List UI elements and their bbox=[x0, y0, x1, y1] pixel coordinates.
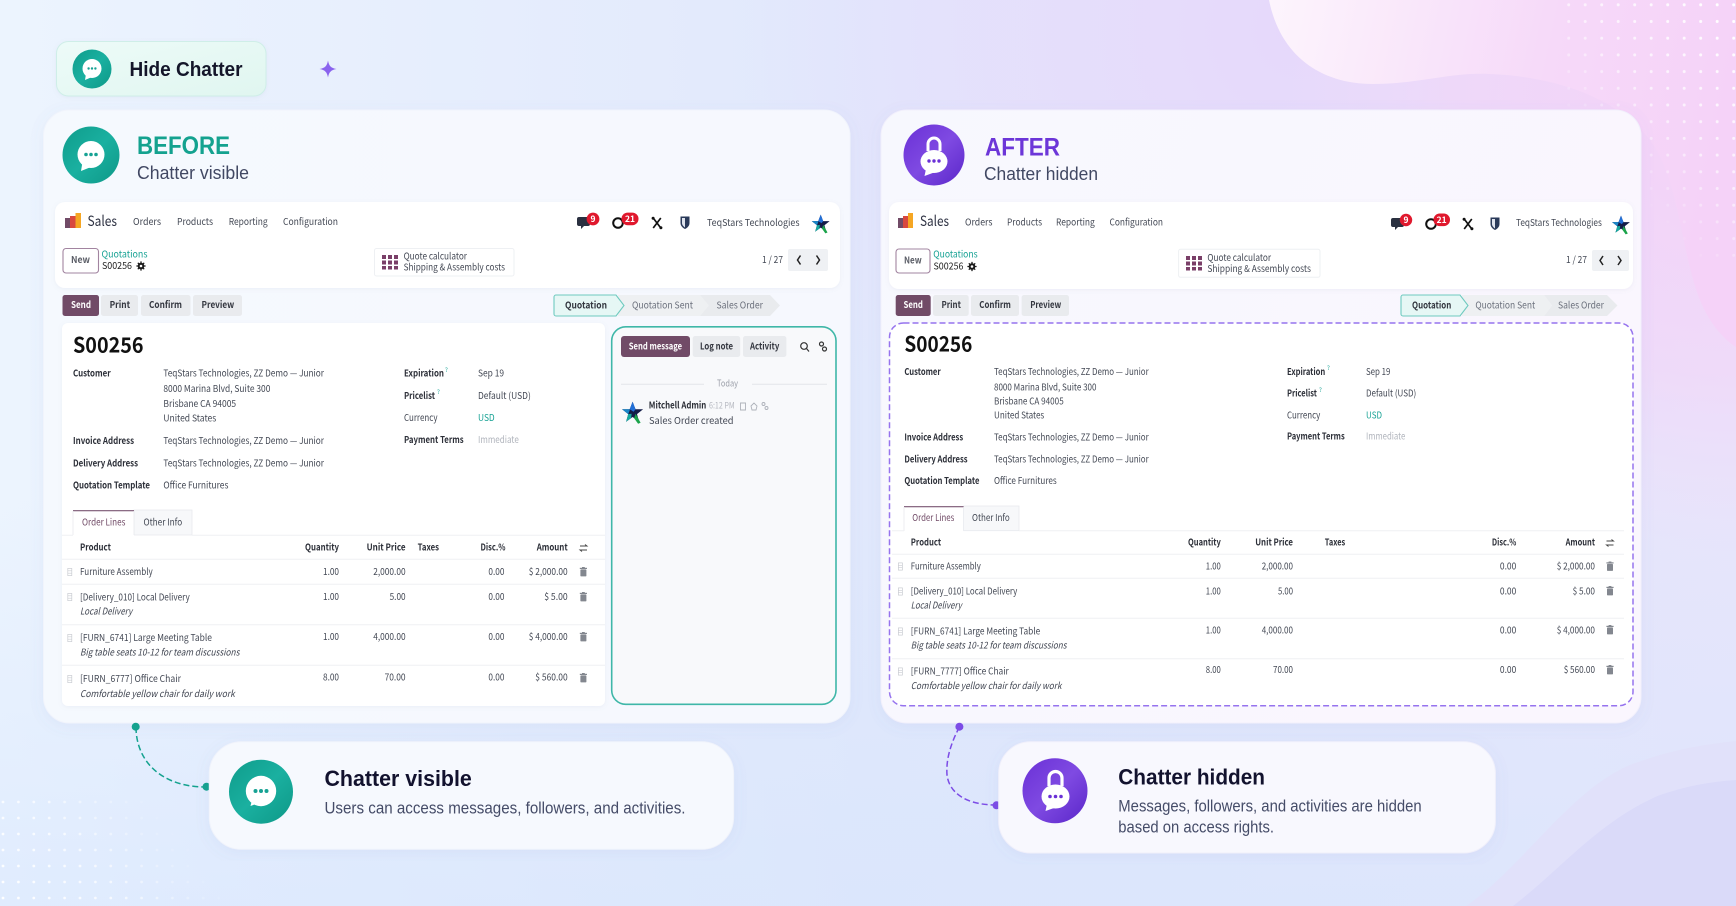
order lines table: 0.00 bbox=[488, 589, 504, 603]
order lines table bbox=[68, 539, 587, 700]
pager bbox=[1566, 250, 1629, 271]
action buttons: Print bbox=[942, 297, 961, 311]
icons: systray: 21 bbox=[1437, 214, 1447, 226]
order lines table: $ 5.00 bbox=[1573, 583, 1595, 597]
customer fields: Office Furnitures bbox=[994, 473, 1057, 487]
order lines table: Disc.% bbox=[480, 539, 506, 553]
order lines table: Amount bbox=[1565, 535, 1595, 549]
form sheet with dashed outline bbox=[890, 323, 1633, 706]
order lines table: [Delivery_010] Local Delivery bbox=[911, 583, 1017, 597]
menu: Products bbox=[1007, 214, 1042, 228]
order lines table: 0.00 bbox=[1500, 662, 1516, 676]
order lines table: [Delivery_010] Local Delivery bbox=[80, 589, 190, 603]
order lines table: 0.00 bbox=[488, 564, 504, 578]
order fields: ? bbox=[1327, 363, 1330, 372]
order lines table: 1.00 bbox=[1206, 622, 1221, 636]
connector: before bbox=[132, 723, 210, 791]
menu: Reporting bbox=[1056, 214, 1095, 228]
icon: chat bubble bbox=[229, 760, 293, 824]
customer fields: TeqStars Technologies, ZZ Demo — Junior bbox=[994, 451, 1149, 465]
callout: chatter visible bbox=[209, 742, 734, 849]
panel: after bbox=[881, 110, 1641, 723]
callout: chatter hidden bbox=[999, 742, 1495, 853]
company name: TeqStars Technologies bbox=[1516, 215, 1602, 229]
breadcrumb bbox=[933, 247, 978, 272]
order lines table: Quantity bbox=[1188, 535, 1221, 549]
order fields: Default (USD) bbox=[478, 388, 531, 402]
new button bbox=[63, 248, 98, 273]
quote calculator bbox=[1179, 249, 1320, 277]
order fields: Currency bbox=[404, 410, 438, 424]
order fields: USD bbox=[1366, 407, 1382, 421]
icon: avatar star bbox=[812, 215, 830, 233]
quote calculator: Quote calculator bbox=[404, 248, 467, 262]
customer fields: Delivery Address bbox=[73, 455, 138, 469]
customer fields: Invoice Address bbox=[904, 429, 963, 443]
order fields: ? bbox=[1319, 385, 1322, 394]
order lines table: Big table seats 10-12 for team discussions bbox=[911, 638, 1068, 652]
order fields: Sep 19 bbox=[478, 366, 504, 380]
order lines table: 0.00 bbox=[1500, 559, 1516, 573]
icons: systray: 9 bbox=[590, 213, 596, 225]
customer fields: Quotation Template bbox=[73, 477, 150, 491]
order lines table: 2,000.00 bbox=[1262, 559, 1293, 573]
order lines table: [FURN_6741] Large Meeting Table bbox=[80, 630, 212, 644]
tabs: Order Lines bbox=[82, 515, 126, 529]
customer fields bbox=[73, 366, 324, 491]
tabs bbox=[73, 510, 192, 536]
subheading: Chatter visible bbox=[137, 163, 249, 183]
tabs: Other Info bbox=[972, 510, 1010, 524]
order lines table: $ 560.00 bbox=[1564, 662, 1595, 676]
form sheet bbox=[62, 323, 605, 706]
date separator: Today bbox=[717, 377, 738, 390]
heading: BEFORE: BEFORE bbox=[137, 132, 230, 160]
customer fields: 8000 Marina Blvd, Suite 300 bbox=[163, 381, 270, 395]
order lines table: Disc.% bbox=[1492, 535, 1516, 549]
icon: sales logo bbox=[898, 213, 913, 228]
icons: search and followers bbox=[801, 342, 826, 352]
icon: avatar star bbox=[1612, 216, 1630, 234]
pager: 1 / 27 bbox=[762, 252, 783, 266]
pager: 1 / 27 bbox=[1566, 252, 1587, 266]
status bar: Quotation bbox=[1412, 298, 1451, 312]
callout text: Messages, followers, and activities are hidden bbox=[1118, 798, 1422, 816]
tabs bbox=[904, 506, 1019, 532]
chatter buttons: Log note bbox=[700, 339, 733, 353]
callout text: based on access rights. bbox=[1118, 819, 1274, 837]
order lines table: 8.00 bbox=[323, 670, 339, 684]
order lines table: $ 4,000.00 bbox=[1557, 622, 1595, 636]
order lines table: Amount bbox=[536, 539, 568, 553]
order lines table: Comfortable yellow chair for daily work bbox=[911, 678, 1063, 692]
chatter buttons: Send message bbox=[629, 339, 683, 353]
order lines table: Furniture Assembly bbox=[911, 559, 981, 573]
order lines table: Big table seats 10-12 for team discussions bbox=[80, 644, 241, 658]
order fields: Sep 19 bbox=[1366, 364, 1390, 378]
order lines table: [FURN_6741] Large Meeting Table bbox=[911, 623, 1040, 637]
breadcrumb bbox=[102, 247, 148, 272]
tabs: Other Info bbox=[144, 515, 182, 529]
customer fields bbox=[904, 364, 1149, 487]
status bar: Quotation Sent bbox=[632, 298, 693, 312]
chatter buttons: Activity bbox=[749, 339, 780, 353]
title text: Hide Chatter bbox=[130, 59, 243, 81]
customer fields: TeqStars Technologies, ZZ Demo — Junior bbox=[994, 364, 1149, 378]
order fields: Expiration bbox=[1287, 364, 1325, 378]
order lines table: Quantity bbox=[305, 539, 340, 553]
action buttons: Send bbox=[71, 297, 91, 311]
order lines table: 5.00 bbox=[390, 589, 406, 603]
app name: Sales bbox=[88, 211, 117, 231]
icons: systray bbox=[577, 213, 690, 229]
breadcrumb: Quotations bbox=[102, 247, 148, 261]
order lines table: Unit Price bbox=[1255, 535, 1293, 549]
order fields bbox=[404, 365, 531, 446]
app top bar bbox=[55, 202, 840, 288]
app top bar bbox=[889, 202, 1633, 289]
action buttons: Preview bbox=[1030, 297, 1061, 311]
customer fields: Delivery Address bbox=[904, 451, 968, 465]
record title: S00256 bbox=[904, 329, 972, 359]
order fields: USD bbox=[478, 410, 495, 424]
quote calculator bbox=[374, 248, 514, 276]
order lines table: 1.00 bbox=[1206, 559, 1221, 573]
message bbox=[622, 398, 768, 427]
icon: before chat bubble bbox=[62, 126, 120, 184]
action buttons: Print bbox=[110, 297, 130, 311]
icons: systray bbox=[1391, 214, 1500, 230]
callout text: Users can access messages, followers, and activities. bbox=[324, 799, 686, 817]
message: Sales Order created bbox=[649, 413, 734, 427]
action buttons bbox=[62, 295, 242, 316]
order lines table: Comfortable yellow chair for daily work bbox=[80, 686, 236, 700]
action buttons: Preview bbox=[202, 297, 234, 311]
customer fields: TeqStars Technologies, ZZ Demo — Junior bbox=[994, 429, 1149, 443]
order lines table: 5.00 bbox=[1278, 583, 1293, 597]
message: Mitchell Admin bbox=[649, 398, 706, 412]
order fields: Payment Terms bbox=[404, 432, 464, 446]
status bar: Sales Order bbox=[716, 298, 763, 312]
callout title: Chatter visible bbox=[324, 766, 472, 791]
icons: systray: 21 bbox=[625, 213, 635, 225]
order lines table: Local Delivery bbox=[911, 597, 964, 611]
order fields bbox=[1287, 363, 1416, 443]
order lines table: [FURN_6777] Office Chair bbox=[80, 671, 181, 685]
breadcrumb: S00256 bbox=[102, 258, 132, 272]
menu: Products bbox=[177, 214, 213, 228]
order lines table: $ 2,000.00 bbox=[1557, 559, 1595, 573]
order lines table: 0.00 bbox=[488, 629, 504, 643]
order lines table: 0.00 bbox=[1500, 622, 1516, 636]
new button: New bbox=[904, 252, 922, 266]
customer fields: TeqStars Technologies, ZZ Demo — Junior bbox=[163, 433, 324, 447]
order lines table: 8.00 bbox=[1206, 662, 1221, 676]
order lines table: Unit Price bbox=[367, 539, 406, 553]
order lines table: $ 2,000.00 bbox=[529, 564, 568, 578]
customer fields: Brisbane CA 94005 bbox=[994, 393, 1064, 407]
menu: Configuration bbox=[1110, 214, 1163, 228]
breadcrumb: Quotations bbox=[933, 247, 978, 261]
order lines table: $ 560.00 bbox=[535, 670, 568, 684]
quote calculator: Quote calculator bbox=[1207, 250, 1271, 264]
order lines table: 70.00 bbox=[1273, 662, 1293, 676]
menu: Configuration bbox=[283, 214, 338, 228]
order lines table: 1.00 bbox=[1206, 583, 1221, 597]
new button bbox=[896, 249, 930, 273]
chatter panel bbox=[612, 327, 836, 704]
order lines table: 1.00 bbox=[323, 629, 339, 643]
callout title: Chatter hidden bbox=[1118, 764, 1265, 789]
status bar bbox=[554, 295, 780, 316]
chatter buttons bbox=[621, 336, 786, 357]
customer fields: United States bbox=[994, 408, 1045, 422]
menu bbox=[965, 214, 1163, 228]
order lines table bbox=[898, 535, 1614, 692]
action buttons bbox=[896, 295, 1069, 316]
order lines table: $ 4,000.00 bbox=[529, 629, 568, 643]
action buttons: Confirm bbox=[149, 297, 182, 311]
status bar bbox=[1401, 295, 1618, 316]
customer fields: Customer bbox=[904, 364, 941, 378]
quote calculator: Shipping & Assembly costs bbox=[1207, 261, 1311, 275]
quote calculator: Shipping & Assembly costs bbox=[404, 260, 506, 274]
order fields: Expiration bbox=[404, 366, 444, 380]
order lines table: 4,000.00 bbox=[1262, 622, 1293, 636]
heading: AFTER: AFTER bbox=[985, 134, 1060, 162]
action buttons: Send bbox=[904, 297, 923, 311]
pager bbox=[762, 249, 828, 271]
new button: New bbox=[71, 252, 90, 266]
order lines table: 1.00 bbox=[323, 564, 339, 578]
order lines table: 2,000.00 bbox=[373, 564, 406, 578]
action buttons: Confirm bbox=[979, 297, 1011, 311]
panel: before bbox=[44, 110, 850, 723]
order fields: Immediate bbox=[478, 432, 519, 446]
company name: TeqStars Technologies bbox=[707, 215, 800, 229]
tabs: Order Lines bbox=[912, 510, 955, 524]
icon: sales logo bbox=[65, 213, 81, 228]
order lines table: 0.00 bbox=[1500, 583, 1516, 597]
order fields: Pricelist bbox=[1287, 386, 1317, 400]
order lines table: Taxes bbox=[418, 539, 439, 553]
order fields: Payment Terms bbox=[1287, 429, 1345, 443]
customer fields: Quotation Template bbox=[904, 473, 980, 487]
order fields: Immediate bbox=[1366, 429, 1405, 443]
order lines table: 70.00 bbox=[385, 670, 406, 684]
icon: chat bubble bbox=[72, 50, 112, 88]
customer fields: Office Furnitures bbox=[163, 477, 229, 491]
order fields: Pricelist bbox=[404, 388, 435, 402]
customer fields: Invoice Address bbox=[73, 433, 134, 447]
customer fields: TeqStars Technologies, ZZ Demo — Junior bbox=[163, 366, 324, 380]
order fields: ? bbox=[445, 365, 448, 374]
order lines table: 0.00 bbox=[488, 670, 504, 684]
order lines table: Product bbox=[80, 539, 111, 553]
customer fields: Brisbane CA 94005 bbox=[163, 396, 236, 410]
order lines table: Product bbox=[911, 535, 941, 549]
menu: Orders bbox=[965, 214, 993, 228]
customer fields: Customer bbox=[73, 366, 111, 380]
icon: lock bubble bbox=[1022, 758, 1088, 823]
order lines table: [FURN_7777] Office Chair bbox=[911, 663, 1009, 677]
customer fields: 8000 Marina Blvd, Suite 300 bbox=[994, 379, 1096, 393]
menu bbox=[133, 214, 338, 228]
order lines table: Taxes bbox=[1325, 535, 1345, 549]
order fields: ? bbox=[437, 387, 440, 396]
message: 6:12 PM bbox=[709, 400, 735, 412]
order fields: Default (USD) bbox=[1366, 386, 1416, 400]
breadcrumb: S00256 bbox=[934, 258, 964, 272]
order lines table: Furniture Assembly bbox=[80, 564, 153, 578]
status bar: Quotation Sent bbox=[1475, 298, 1536, 312]
record title: S00256 bbox=[73, 330, 144, 360]
order lines table: 1.00 bbox=[323, 589, 339, 603]
icon: after lock bubble bbox=[904, 124, 964, 186]
subheading: Chatter hidden bbox=[984, 164, 1098, 184]
menu: Orders bbox=[133, 214, 161, 228]
customer fields: United States bbox=[163, 410, 217, 424]
status bar: Quotation bbox=[565, 298, 607, 312]
order fields: Currency bbox=[1287, 407, 1320, 421]
app name: Sales bbox=[920, 211, 949, 231]
order lines table: $ 5.00 bbox=[544, 589, 568, 603]
title pill: Hide Chatter bbox=[56, 42, 266, 96]
menu: Reporting bbox=[229, 214, 268, 228]
icons: systray: 9 bbox=[1403, 214, 1409, 226]
connector: after bbox=[947, 723, 1000, 809]
customer fields: TeqStars Technologies, ZZ Demo — Junior bbox=[163, 455, 324, 469]
order lines table: 4,000.00 bbox=[373, 629, 406, 643]
icon: sparkle bbox=[320, 60, 336, 78]
order lines table: Local Delivery bbox=[80, 604, 134, 618]
status bar: Sales Order bbox=[1558, 298, 1604, 312]
